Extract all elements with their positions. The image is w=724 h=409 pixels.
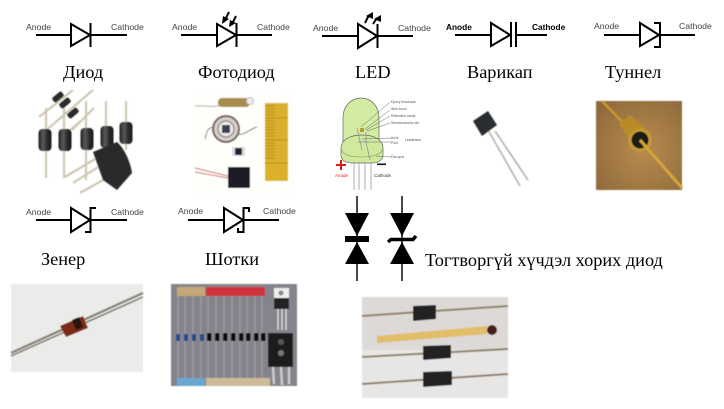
photo: LED diagram: Semiconductor die bbox=[391, 121, 419, 125]
symbol: schottky: Anode bbox=[178, 206, 203, 216]
photo: LED diagram: Wire bond bbox=[391, 107, 407, 111]
symbol: schottky bbox=[178, 206, 296, 232]
photo: LED diagram: Anode bbox=[335, 173, 349, 178]
symbol: varicap: Cathode bbox=[532, 22, 566, 32]
photo: LED diagram: Anvil bbox=[391, 136, 399, 140]
photo: zener bbox=[11, 284, 143, 372]
symbol: photodiode: Cathode bbox=[257, 22, 290, 32]
symbol: varicap: Anode bbox=[446, 22, 472, 32]
photo: tunnel diode bbox=[596, 101, 682, 190]
photo: LED diagram: Flat spot bbox=[391, 155, 404, 159]
photo: schottky diodes bbox=[171, 284, 297, 386]
photo: LED diagram: Epoxy lens/case bbox=[391, 100, 416, 104]
photo: TVS diodes with match bbox=[362, 297, 508, 398]
photo: photodiodes bbox=[195, 92, 293, 195]
symbol: tunnel diode: Anode bbox=[594, 21, 619, 31]
label: photodiode: Фотодиод bbox=[198, 62, 275, 82]
label: varicap: Варикап bbox=[467, 62, 533, 82]
photo: LED diagram: Reflective cavity bbox=[391, 114, 416, 118]
symbol: diode bbox=[26, 22, 144, 47]
photo: LED diagram bbox=[335, 98, 421, 190]
symbol: zener: Cathode bbox=[111, 207, 144, 217]
symbol: diode: Anode bbox=[26, 22, 51, 32]
photo: LED diagram: Post bbox=[391, 141, 398, 145]
photo: varicap bbox=[473, 111, 528, 186]
symbol: zener bbox=[26, 207, 144, 232]
symbol: TVS unidirectional bbox=[345, 196, 369, 281]
label: schottky: Шотки bbox=[205, 249, 259, 269]
symbol: LED bbox=[313, 12, 431, 48]
symbol: tunnel diode: Cathode bbox=[679, 21, 712, 31]
symbol: schottky: Cathode bbox=[263, 206, 296, 216]
label: zener: Зенер bbox=[41, 249, 85, 269]
symbol: tunnel diode bbox=[594, 21, 712, 47]
symbol: diode: Cathode bbox=[111, 22, 144, 32]
symbol: photodiode bbox=[172, 12, 290, 47]
symbol: varicap bbox=[446, 22, 566, 47]
photo: LED diagram: Leadframe bbox=[405, 138, 421, 142]
label: diode: Диод bbox=[63, 62, 103, 82]
symbol: TVS bidirectional bbox=[388, 196, 416, 281]
symbol: photodiode: Anode bbox=[172, 22, 197, 32]
label: TVS diode: Тогтворгүй хүчдэл хорих диод bbox=[425, 250, 663, 270]
photo: diodes bbox=[38, 90, 132, 193]
symbol: LED: Anode bbox=[313, 23, 338, 33]
label: tunnel: Туннел bbox=[605, 62, 661, 82]
symbol: zener: Anode bbox=[26, 207, 51, 217]
photo: LED diagram: Cathode bbox=[374, 173, 392, 178]
label: LED: LED bbox=[355, 62, 391, 82]
symbol: LED: Cathode bbox=[398, 23, 431, 33]
